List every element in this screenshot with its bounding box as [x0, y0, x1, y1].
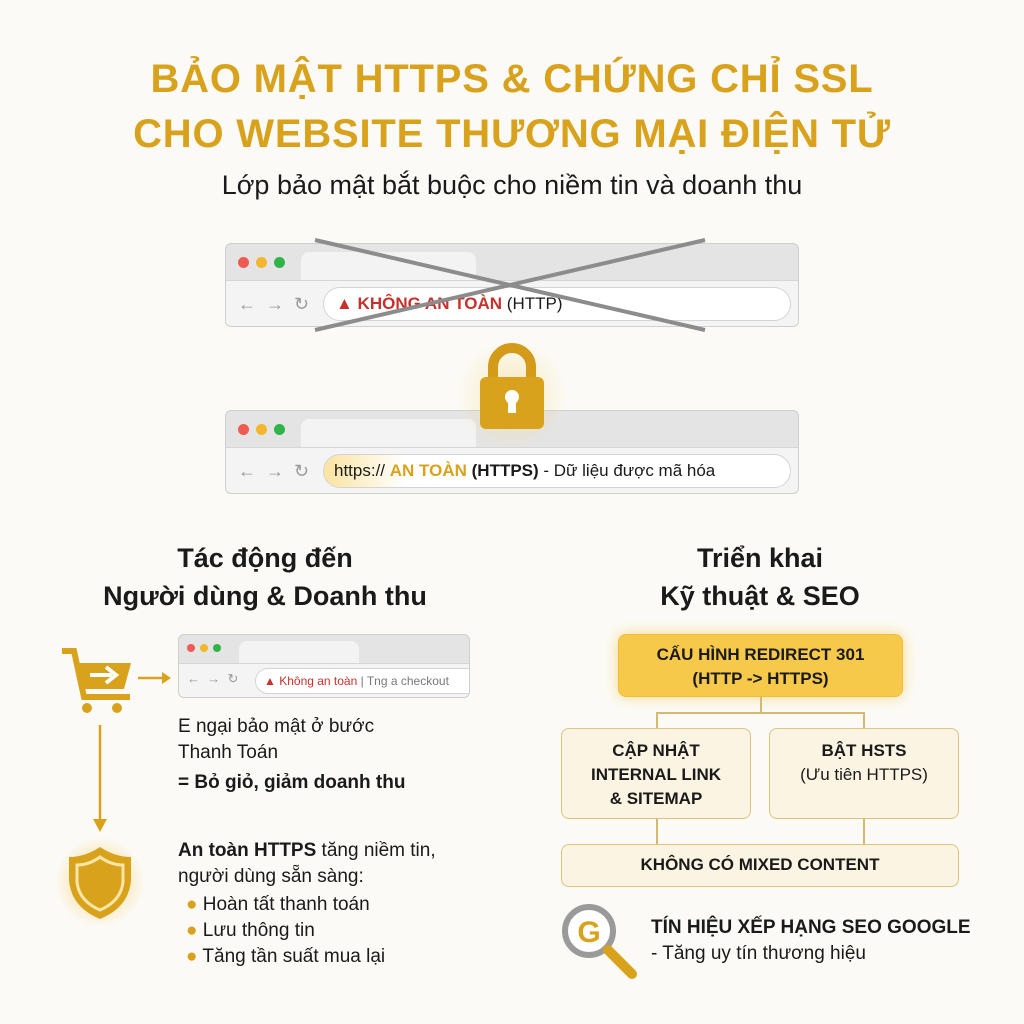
box: hsts: (Ưu tiên HTTPS) [800, 765, 928, 784]
icon: google magnifier [562, 904, 637, 979]
box: internal link: CẬP NHẬT [612, 741, 700, 760]
small browser: checkout: ▲ Không an toàn | Tng a checkout [264, 674, 449, 688]
icon: google magnifier: G [577, 916, 601, 949]
arrow: cart to browser [138, 672, 171, 684]
box: internal link [561, 728, 751, 819]
title [133, 56, 891, 156]
cross mark [314, 238, 706, 332]
title: CHO WEBSITE THƯƠNG MẠI ĐIỆN TỬ [133, 112, 891, 156]
text: hesitation: = Bỏ giỏ, giảm doanh thu [178, 772, 405, 793]
heading: technical: Kỹ thuật & SEO [660, 581, 860, 611]
arrow: down [93, 725, 107, 832]
text: https benefits: người dùng sẵn sàng: [178, 866, 364, 887]
icon: cart [62, 648, 131, 713]
small browser: checkout [178, 634, 470, 698]
heading: impact: Tác động đến [177, 543, 353, 573]
title: BẢO MẬT HTTPS & CHỨNG CHỈ SSL [150, 57, 874, 101]
box: redirect 301: CẤU HÌNH REDIRECT 301 [657, 645, 864, 664]
subtitle: Lớp bảo mật bắt buộc cho niềm tin và doanh thu [222, 170, 802, 200]
heading: impact [103, 543, 427, 611]
icon: padlock [464, 343, 560, 442]
browser: http insecure: ← → ↻ [238, 294, 309, 314]
text: https benefits: ● Hoàn tất thanh toán [186, 894, 370, 915]
connectors [760, 697, 762, 713]
box: internal link: & SITEMAP [610, 789, 702, 808]
box: internal link: INTERNAL LINK [591, 765, 721, 784]
box: mixed content: KHÔNG CÓ MIXED CONTENT [641, 855, 879, 874]
text: seo signal: - Tăng uy tín thương hiệu [651, 943, 866, 964]
small browser: checkout: ← → ↻ [187, 671, 238, 686]
text: seo signal [651, 916, 971, 964]
browser: http insecure [225, 243, 799, 327]
browser: http insecure: ▲ KHÔNG AN TOÀN (HTTP) [336, 294, 562, 313]
box: redirect 301: (HTTP -> HTTPS) [692, 669, 829, 688]
text: hesitation: Thanh Toán [178, 742, 278, 763]
heading: technical: Triển khai [697, 543, 823, 573]
heading: impact: Người dùng & Doanh thu [103, 581, 427, 611]
text: hesitation [178, 716, 405, 793]
box: mixed content [561, 844, 959, 887]
text: hesitation: E ngại bảo mật ở bước [178, 716, 374, 737]
browser: https secure: https:// AN TOÀN (HTTPS) - Dữ liệu được mã hóa [334, 461, 715, 480]
box: hsts: BẬT HSTS [822, 741, 906, 760]
text: seo signal: TÍN HIỆU XẾP HẠNG SEO GOOGLE [651, 917, 971, 938]
text: https benefits: An toàn HTTPS tăng niềm tin, [178, 840, 436, 861]
text: https benefits [178, 840, 436, 967]
browser: https secure: ← → ↻ [238, 461, 309, 481]
text: https benefits: ● Tăng tần suất mua lại [186, 946, 385, 967]
box: hsts [769, 728, 959, 819]
box: redirect 301 [618, 634, 903, 697]
heading: technical [660, 543, 860, 611]
browser: https secure [225, 410, 799, 494]
icon: shield [58, 840, 142, 924]
text: https benefits: ● Lưu thông tin [186, 920, 315, 941]
